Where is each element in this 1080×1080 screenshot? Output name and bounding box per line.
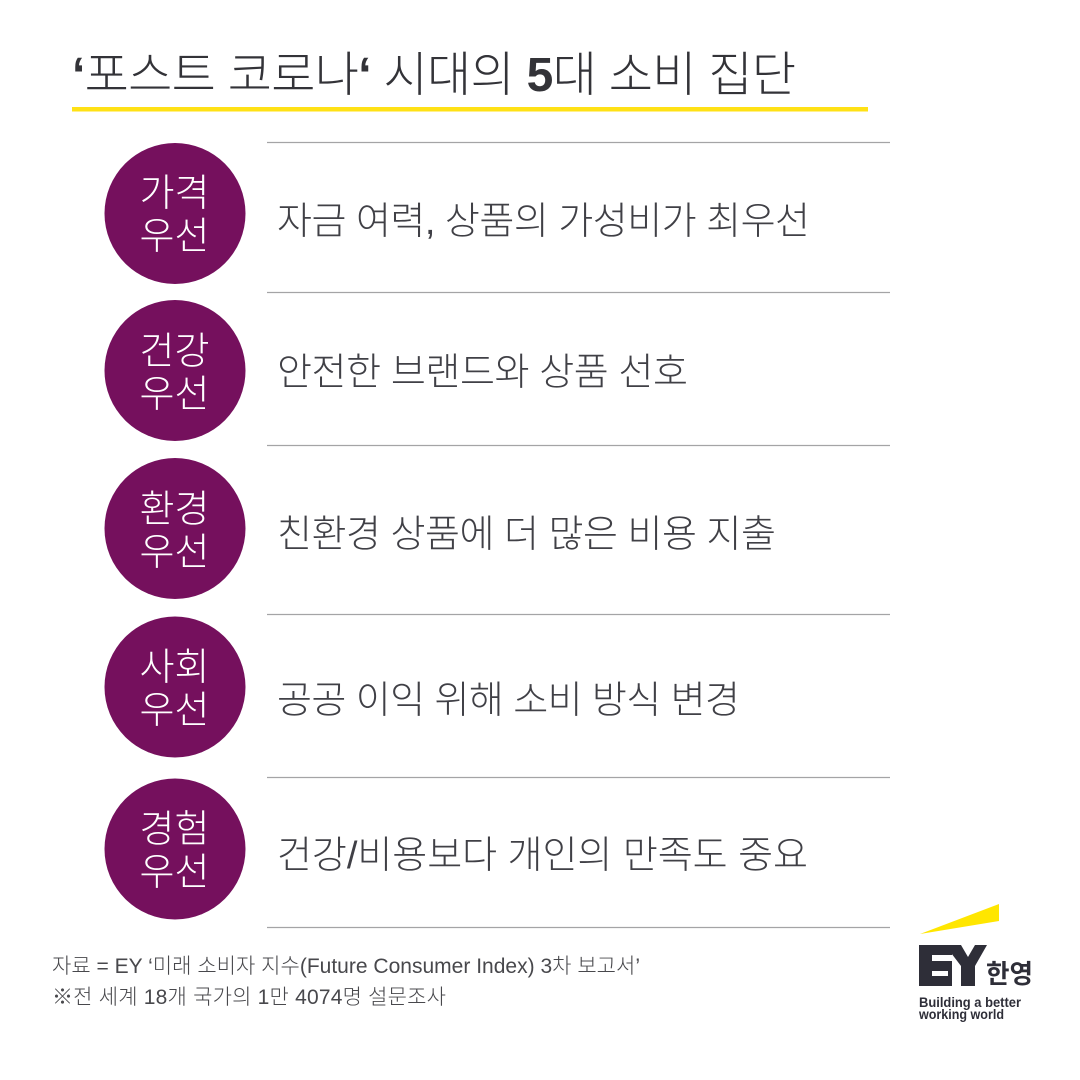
row: price first: 우선 <box>140 216 209 258</box>
row: environment first: 환경 <box>140 489 209 531</box>
logo beam <box>920 904 999 934</box>
row: health first: 우선 <box>140 374 209 416</box>
row: environment first <box>104 458 776 599</box>
title underline <box>72 107 868 112</box>
row: society first: 공공 이익 위해 소비 방식 변경 <box>277 680 740 722</box>
row: society first: 우선 <box>140 690 209 732</box>
row: health first: 건강 <box>140 331 209 373</box>
row: price first: 자금 여력, 상품의 가성비가 최우선 <box>277 201 810 243</box>
row: experience first: 우선 <box>140 852 209 894</box>
row: environment first: 우선 <box>140 532 209 574</box>
row: experience first <box>104 778 808 920</box>
row: price first <box>104 143 810 284</box>
row: society first <box>104 616 740 758</box>
source note: ※전 세계 18개 국가의 1만 4074명 설문조사 <box>52 986 446 1009</box>
row: environment first: 친환경 상품에 더 많은 비용 지출 <box>277 514 776 556</box>
row: experience first: 경험 <box>140 809 209 851</box>
logo: EY Hanyoung: Building a better <box>919 995 1022 1010</box>
logo: EY Hanyoung <box>918 904 1033 1022</box>
row: experience first: 건강/비용보다 개인의 만족도 중요 <box>277 835 808 877</box>
row: health first <box>104 300 688 441</box>
source note <box>52 955 640 1009</box>
row: price first: 가격 <box>140 173 209 215</box>
logo: EY Hanyoung: working world <box>918 1007 1004 1022</box>
row: health first: 안전한 브랜드와 상품 선호 <box>277 352 688 394</box>
row: society first: 사회 <box>140 647 209 689</box>
title: ‘포스트 코로나‘ 시대의 5대 소비 집단 <box>72 49 796 102</box>
source note: 자료 = EY ‘미래 소비자 지수(Future Consumer Index) 3차 보고서’ <box>52 955 640 978</box>
logo: EY Hanyoung: 한영 <box>986 959 1033 989</box>
